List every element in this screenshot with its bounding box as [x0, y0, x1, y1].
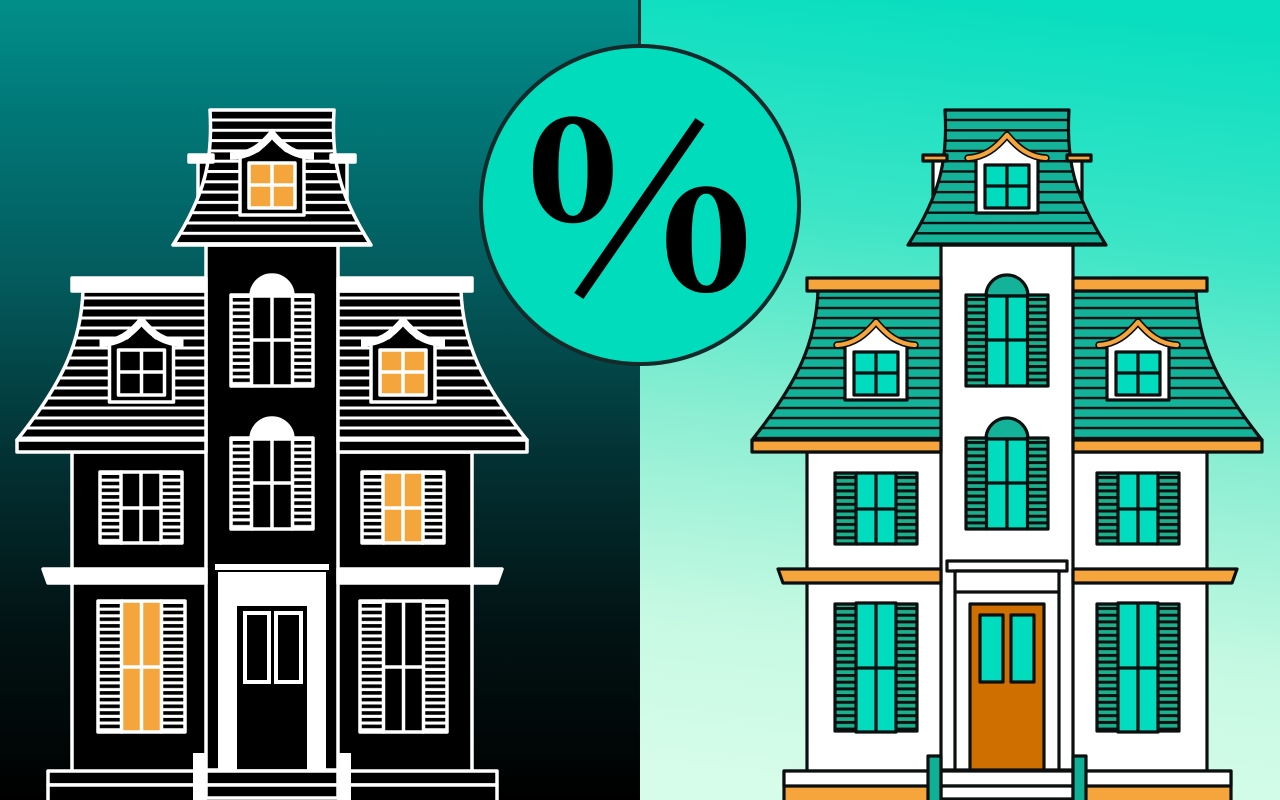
left ground floor window, lit: [98, 601, 185, 732]
right tower arched window upper: [966, 275, 1048, 386]
left porch and door: [215, 564, 329, 770]
right tower arched window lower: [966, 418, 1048, 529]
left tower arched window upper: [231, 275, 313, 386]
right upper cornice posts: [933, 160, 1082, 204]
percent badge: [481, 28, 799, 364]
right roof dormer, left: [837, 322, 915, 400]
badge circle: [481, 46, 799, 364]
right second floor window, right: [1097, 473, 1179, 544]
right upper cornice: [923, 155, 1091, 161]
right house body: [807, 452, 1207, 772]
right foundation and steps: [784, 771, 1231, 800]
left top cornices: [72, 278, 472, 291]
right main roof, right side: [1073, 291, 1262, 440]
center divider line: [638, 0, 641, 60]
percent sign: %: [525, 28, 754, 355]
right tower dormer: [968, 135, 1046, 213]
right ground floor window, left: [835, 603, 917, 732]
right tower: [941, 245, 1073, 770]
left tower arched window lower: [231, 418, 313, 529]
left main roof, left side: [17, 291, 206, 440]
right second floor window, left: [835, 473, 917, 544]
left foundation and steps: [48, 771, 497, 800]
right ground floor window, right: [1097, 603, 1179, 732]
left roof dormer, dark: [100, 321, 184, 402]
left second floor window, lit: [362, 472, 444, 543]
left stair posts: [193, 753, 351, 800]
right upper roof: [908, 110, 1106, 245]
right stair posts: [928, 756, 1086, 800]
right mid floor band: [778, 569, 1237, 583]
left upper cornice: [189, 155, 355, 162]
left mid floor band: [43, 569, 502, 583]
left upper roof: [173, 110, 371, 245]
left tower dormer, lit: [230, 134, 314, 215]
right roof dormer, right: [1099, 322, 1177, 400]
left second floor window, dark: [100, 472, 182, 543]
right mint gradient background: [640, 0, 1280, 800]
left main roof, right side: [338, 291, 527, 440]
left house: night version: [17, 110, 527, 800]
right porch and door: [947, 561, 1067, 770]
right eaves: [752, 440, 1262, 452]
left upper cornice posts: [198, 160, 347, 204]
right main roof, left side: [752, 291, 941, 440]
left ground floor window, dark: [360, 601, 447, 732]
left house body: [72, 452, 472, 772]
right top cornices: [807, 278, 1207, 291]
left dark gradient background: [0, 0, 640, 800]
right house: day version: [752, 110, 1262, 800]
left roof dormer, lit: [361, 321, 445, 402]
left eaves: [17, 440, 527, 452]
left tower behind upper roof: [206, 245, 338, 770]
